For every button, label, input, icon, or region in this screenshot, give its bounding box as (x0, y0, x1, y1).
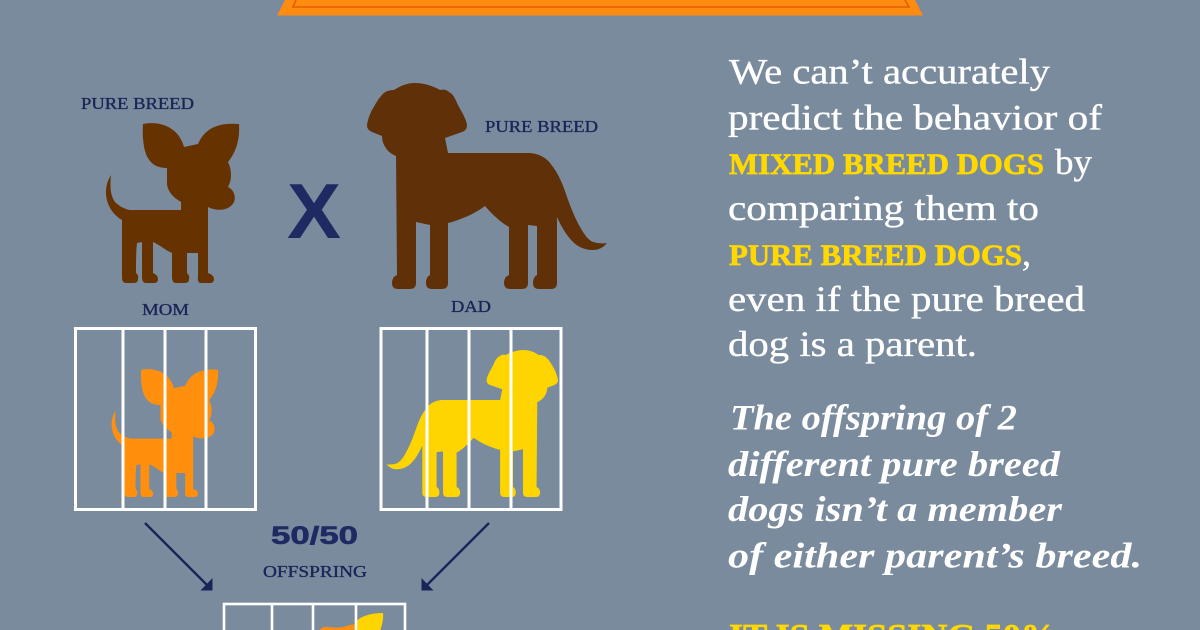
text block: mixed breed explanation: even if the pure breed (728, 279, 1085, 319)
text block: mixed breed explanation: , (1022, 233, 1031, 273)
label: mom: MOM (142, 300, 189, 319)
text block: mixed breed explanation: by (1055, 142, 1092, 182)
text block: mixed breed explanation: dog is a parent. (728, 324, 977, 364)
text block: mixed breed explanation: PURE BREED DOGS (729, 239, 1022, 272)
cage: offspring with mixed dog (224, 604, 405, 630)
icon: small brown dog (106, 123, 239, 283)
label: mom pure breed: PURE BREED (81, 94, 194, 113)
ratio 50/50: 50/50 (271, 522, 358, 550)
arrow: dad to offspring (422, 523, 489, 590)
text block: offspring italic statement: dogs isn’t a member (728, 489, 1063, 529)
label: dad: DAD (451, 297, 491, 316)
text block: offspring italic statement: different pure breed (728, 444, 1061, 484)
text block: mixed breed explanation: comparing them to (728, 188, 1039, 228)
text block: mixed breed explanation: predict the behavior of (728, 98, 1102, 138)
cage: dad with yellow dog (381, 328, 561, 510)
multiply sign: X (287, 167, 341, 255)
icon: big brown dog (367, 83, 607, 289)
text block: offspring italic statement (728, 398, 1142, 576)
banner (277, 0, 923, 16)
text block: mixed breed explanation: MIXED BREED DOGS (729, 148, 1044, 181)
text block: offspring italic statement: of either parent’s breed. (728, 536, 1142, 576)
text block: offspring italic statement: The offspring of 2 (730, 398, 1017, 438)
text block: mixed breed explanation: We can’t accurately (729, 52, 1050, 92)
cage: mom with orange dog (76, 328, 256, 510)
text block: mixed breed explanation (728, 52, 1102, 364)
label: offspring: OFFSPRING (263, 562, 367, 581)
label: dad pure breed: PURE BREED (485, 117, 598, 136)
arrow: mom to offspring (145, 523, 212, 590)
